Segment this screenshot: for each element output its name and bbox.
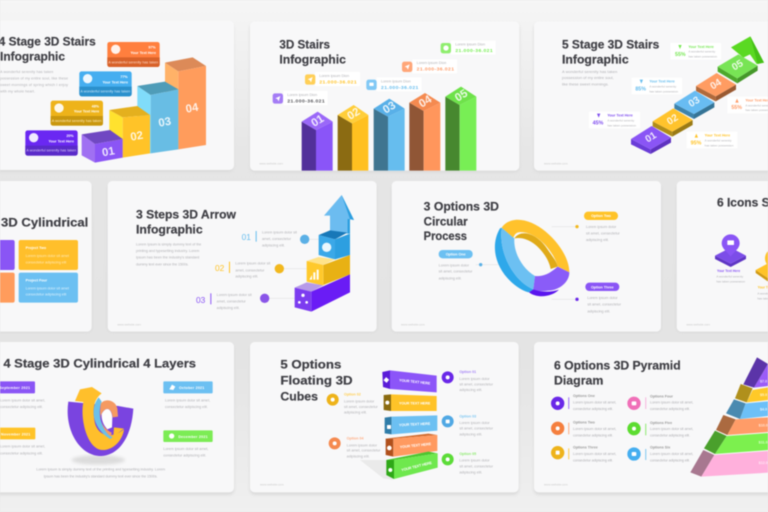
title: Infographic: [562, 53, 629, 67]
pyramid: $5.0: [760, 393, 767, 397]
icon purple: has taken possession: [716, 280, 745, 284]
callout 45%: has taken possession: [607, 123, 636, 127]
option 02: adipiscing elit.: [344, 410, 367, 414]
card yellow: Project Two: [26, 246, 47, 250]
label 2: [305, 72, 360, 86]
pyramid: $4.0: [760, 408, 767, 412]
card orange: [0, 273, 15, 303]
stair 02: 02: [130, 130, 144, 144]
callout 55% green: [670, 43, 721, 60]
option 01: [442, 370, 494, 392]
text block: [36, 468, 165, 478]
pyramid: $12.0: [759, 461, 768, 465]
title: Infographic: [0, 49, 65, 63]
label 4: 21.000-36.021: [417, 67, 454, 73]
item 01: [242, 231, 320, 248]
3D arrow stairs: [295, 195, 354, 312]
callout 85%: 85%: [635, 87, 646, 93]
item 02: 02: [215, 263, 225, 273]
footer: www.website.com: [260, 483, 284, 487]
card yellow: Lorem ipsum dolor sit amet: [26, 254, 69, 258]
option three: Lorem ipsum dolor sit amet,: [573, 452, 616, 456]
item 03: 03: [196, 295, 206, 305]
option 05: sit amet, consectetur: [459, 464, 494, 468]
3D cylinder layers: [68, 387, 133, 456]
callout 95%: 95%: [691, 141, 702, 147]
icon purple: A wonderful serenity: [716, 274, 744, 278]
panel: 4 Stage 3D Stairs: [0, 21, 234, 172]
cube green: [386, 452, 438, 479]
option three: Options Three: [573, 445, 598, 449]
text block: A wonderful serenity has taken: [0, 70, 53, 74]
option 01: sit amet, consectetur: [459, 383, 494, 387]
option 03: sit amet, consectetur: [459, 426, 494, 430]
card blue: [19, 273, 78, 303]
title: Floating 3D: [280, 374, 353, 388]
chip September: September 2021: [0, 386, 30, 390]
option 04: [329, 436, 381, 459]
cube green: YOUR TEXT HERE: [401, 461, 433, 472]
option 04: adipiscing elit.: [347, 455, 370, 459]
item 02: adipiscing elit.: [235, 275, 258, 279]
card: orange 97%: Your Text Here: [131, 51, 156, 55]
callout 55% green: has taken possession: [688, 54, 717, 58]
option two: adipiscing elit.: [586, 238, 609, 242]
text block: [562, 69, 617, 86]
cube orange: [386, 434, 437, 457]
arrow: [731, 36, 764, 64]
stair 02: [109, 106, 150, 158]
option three: consectetur adipiscing elit.: [573, 458, 613, 462]
title: [0, 35, 96, 63]
option four: consectetur adipiscing elit.: [650, 407, 690, 411]
3D ring: [495, 220, 569, 296]
cube yellow: [384, 394, 437, 411]
text block: like these sweet mornings.: [562, 81, 609, 86]
item 03: adipiscing elit.: [217, 306, 240, 310]
card: blue 77%: A wonderful serenity has taken: [80, 90, 130, 94]
card blue: Lorem ipsum dolor sit amet: [26, 286, 69, 290]
step 01: [631, 126, 671, 154]
option six: consectetur adipiscing elit.: [650, 458, 690, 462]
title: 5 Stage 3D Stairs: [562, 38, 660, 52]
text block: [0, 70, 68, 93]
option 03: Option 03: [459, 414, 476, 418]
bar 01: 01: [309, 113, 326, 130]
text block: Lorem Ipsum is simply dummy text of the: [136, 242, 201, 246]
chip September: Lorem ipsum dolor sit amet,: [0, 399, 45, 403]
step 01: 01: [643, 130, 659, 145]
option four: Options Four: [650, 394, 674, 398]
card blue: consectetur adipiscing elit: [26, 293, 66, 297]
pyramid: $10.0: [759, 424, 768, 428]
option 02: Option 02: [344, 392, 361, 396]
callout 55% orange: 55%: [731, 105, 742, 111]
bar 04: 04: [417, 93, 435, 110]
pyramid: [690, 357, 768, 477]
step 04: 04: [708, 77, 724, 92]
panel: 3 Steps 3D Arrow: [108, 181, 377, 332]
title: 3D Cylindrical: [1, 215, 88, 229]
title: [280, 357, 353, 404]
title: 3 Steps 3D Arrow: [136, 208, 237, 222]
option three: Lorem ipsum dolor: [587, 296, 618, 300]
label 2: Lorem ipsum Dion: [319, 74, 349, 78]
title: 3D Stairs: [279, 38, 330, 52]
pyramid: $7.0: [760, 379, 767, 383]
text block: with my whole heart.: [0, 89, 35, 93]
chip November: [0, 428, 45, 455]
option six: [627, 445, 693, 462]
title: [554, 359, 681, 388]
option two: sit amet, consectetur: [586, 232, 621, 236]
item 03: [196, 293, 295, 310]
chip December: [163, 430, 213, 458]
card purple: [0, 240, 15, 270]
panel: 6 Icons Steps: [677, 181, 768, 332]
title: 4 Stage 3D Cylindrical 4 Layers: [3, 356, 196, 370]
option four: [627, 394, 693, 411]
title: [136, 208, 237, 237]
callout 45%: 45%: [593, 121, 604, 127]
option one: Option One: [446, 252, 466, 256]
option 05: Option 05: [459, 452, 476, 456]
option 05: adipiscing elit.: [459, 470, 482, 474]
option three: Option Three: [591, 285, 614, 289]
footer: www.website.com: [544, 162, 568, 166]
step 03: [674, 91, 714, 119]
option six: Lorem ipsum dolor sit amet,: [650, 452, 693, 456]
stair 03: [137, 82, 178, 153]
option two: consectetur adipiscing elit.: [573, 433, 613, 437]
stair 04: 04: [185, 102, 200, 116]
step 03: 03: [687, 95, 702, 110]
cube orange: YOUR TEXT HERE: [400, 442, 432, 449]
title: Infographic: [279, 53, 346, 67]
step 05: [718, 54, 758, 83]
cube blue: [385, 415, 437, 434]
icon yellow: [756, 248, 768, 300]
card: blue 77%: Your Text Here: [103, 80, 128, 84]
title: Diagram: [554, 374, 603, 388]
chip December: December 2021: [178, 435, 208, 439]
text block: A wonderful serenity has taken: [562, 69, 617, 74]
callout 45%: [589, 112, 640, 128]
callout 95%: [687, 132, 737, 148]
card: blue 77%: [79, 71, 132, 96]
option 05: Lorem ipsum dolor: [459, 459, 490, 463]
card: yellow 48%: 48%: [92, 104, 100, 108]
bar 05: [445, 87, 476, 171]
label 1: 21.000-36.021: [287, 99, 325, 105]
card: purple 20%: 20%: [66, 134, 74, 138]
option five: [627, 421, 693, 437]
step 04: [696, 73, 736, 101]
callout 85%: A wonderful serenity: [649, 85, 677, 89]
option three: sit amet, consectetur: [587, 303, 622, 307]
callout 95%: Your Text Here: [705, 134, 730, 138]
option 04: sit amet, consectetur: [347, 449, 381, 453]
panel: 3D Stairs Infographic: [250, 21, 519, 172]
text block: Lorem Ipsum is simply dummy text of the printing and typesetting industry. Lorem: [36, 468, 165, 472]
callout 95%: has taken possession: [705, 143, 734, 147]
card blue: Project Four: [26, 278, 48, 282]
step 02: 02: [665, 112, 681, 128]
option five: consectetur adipiscing elit.: [650, 433, 690, 437]
cube purple: YOUR TEXT HERE: [399, 378, 431, 386]
option two: [552, 212, 621, 242]
callout 55% green: 55%: [675, 52, 686, 58]
cube blue: YOUR TEXT HERE: [399, 422, 431, 427]
label 1: [273, 91, 328, 105]
option two: Options Two: [573, 420, 596, 424]
card: yellow 48%: [51, 101, 103, 126]
label 3: Lorem ipsum Dion: [381, 79, 411, 83]
card: orange 97%: 97%: [148, 46, 156, 50]
option 03: adipiscing elit.: [459, 432, 482, 436]
callout 45%: Your Text Here: [607, 113, 633, 117]
footer: www.website.com: [117, 322, 142, 326]
bar 04: [409, 93, 440, 171]
option three: [551, 445, 616, 462]
title: Circular: [424, 214, 468, 228]
label 3: 21.000-36.021: [381, 85, 419, 91]
chip November: November 2021: [1, 433, 30, 437]
item 02: Lorem ipsum dolor sit: [235, 262, 270, 266]
text block: Ipsum has been the industry's standard dummy text ever since the 1500s.: [44, 474, 158, 478]
option one: [439, 250, 498, 280]
item 01: amet, consectetur: [262, 237, 292, 241]
bar 03: [374, 99, 405, 171]
text block: sweet mornings of spring which I enjoy: [0, 83, 68, 87]
pyramid: $11.0: [759, 440, 768, 444]
panel: 3 Options 3D Circular Process: [392, 181, 661, 332]
item 02: amet, consectetur: [235, 268, 265, 272]
label 4: [402, 59, 457, 73]
panel: 3D Cylindrical: [0, 181, 92, 332]
text block: dummy text ever since the 1500s.: [136, 262, 189, 266]
option three: [552, 283, 622, 313]
chip October: October 2021: [179, 386, 204, 390]
item 01: Lorem ipsum dolor sit: [262, 231, 297, 235]
panel: 5 Options Floating 3D Cubes: [250, 342, 519, 495]
option 02: [327, 392, 379, 414]
footer: www.website.com: [401, 322, 425, 326]
text block: printing and typesetting industry. Lorem: [136, 249, 199, 253]
title: [424, 200, 499, 243]
title: 5 Options: [280, 357, 341, 371]
chip November: Lorem ipsum dolor sit amet,: [0, 445, 45, 449]
stair 01: 01: [101, 145, 116, 159]
option two: [551, 420, 616, 437]
bar 05: 05: [453, 88, 470, 104]
title: [279, 38, 346, 67]
option one: [551, 394, 616, 411]
option one: sit amet, consectetur: [439, 270, 473, 274]
option four: Lorem ipsum dolor sit amet,: [650, 401, 693, 405]
title: Process: [424, 229, 467, 243]
text block: [136, 242, 201, 266]
callout 45%: A wonderful serenity: [607, 119, 635, 123]
icon purple: [715, 234, 746, 284]
panel: 4 Stage 3D Cylindrical 4 Layers: [0, 342, 234, 495]
title: [562, 38, 660, 67]
option six: Options Six: [650, 445, 670, 449]
callout 85%: [632, 78, 682, 94]
option 03: [442, 414, 494, 436]
option five: Lorem ipsum dolor sit amet,: [650, 427, 693, 431]
stair 03: 03: [158, 116, 172, 130]
option two: Option Two: [591, 214, 612, 218]
title: Infographic: [136, 223, 203, 237]
text block: possession of my entire soul,: [562, 75, 614, 80]
callout 85%: Your Text Here: [649, 80, 675, 84]
card: purple 20%: Your Text Here: [49, 139, 74, 143]
chip December: consectetur adipiscing elit.: [163, 454, 206, 458]
option two: Lorem ipsum dolor sit amet,: [573, 427, 616, 431]
icon purple: Your Text Here: [717, 269, 740, 273]
label 4: Lorem ipsum Dion: [417, 61, 446, 65]
chip December: Lorem ipsum dolor sit amet,: [163, 447, 208, 451]
stair 01: [82, 130, 123, 163]
bar 03: 03: [381, 100, 398, 116]
card yellow: [19, 240, 78, 270]
option 04: Option 04: [347, 436, 364, 440]
title: 6 Options 3D Pyramid: [554, 359, 681, 373]
item 01: 01: [242, 232, 251, 242]
card: purple 20%: [25, 130, 78, 156]
option one: Lorem ipsum dolor: [439, 263, 470, 267]
label 5: Lorem ipsum Dion: [455, 42, 485, 46]
stair 04: [165, 57, 206, 149]
panel: 5 Stage 3D Stairs: [534, 21, 768, 172]
label 3: [366, 77, 422, 91]
option 01: Option 01: [459, 370, 476, 374]
card: yellow 48%: A wonderful serenity has taken: [52, 119, 102, 123]
bar 02: [338, 105, 368, 171]
option 02: sit amet, consectetur: [344, 405, 379, 409]
option 02: Lorem ipsum dolor: [344, 399, 375, 403]
footer: www.website.com: [686, 322, 711, 326]
shadow under shape: [72, 455, 125, 465]
cube purple: [382, 370, 437, 392]
panel: 6 Options 3D Pyramid: [534, 342, 768, 495]
bar 01: [302, 112, 333, 171]
card: purple 20%: A wonderful serenity has taken: [26, 149, 76, 153]
label 5: 21.000-36.021: [455, 48, 493, 54]
label 5: [441, 41, 496, 55]
option three: adipiscing elit.: [587, 309, 610, 313]
card: orange 97%: A wonderful serenity has taken: [108, 60, 158, 64]
label 1: Lorem ipsum Dion: [287, 93, 317, 97]
callout 95%: A wonderful serenity: [705, 139, 732, 143]
option one: adipiscing elit.: [439, 276, 462, 280]
title: Cubes: [280, 390, 318, 404]
option two: Lorem ipsum dolor: [586, 225, 617, 229]
callout 55% orange: [727, 97, 768, 113]
option 01: Lorem ipsum dolor: [459, 377, 490, 381]
text block: possession of my entire soul, like these: [0, 76, 68, 80]
shadow: [360, 460, 393, 480]
bar 02: 02: [345, 106, 362, 123]
card: orange 97%: [107, 42, 160, 67]
option 03: Lorem ipsum dolor: [459, 421, 490, 425]
chip September: consectetur adipiscing elit.: [0, 405, 43, 409]
title: 3 Options 3D: [424, 200, 499, 214]
card: blue 77%: 77%: [120, 75, 128, 79]
chip October: Lorem ipsum dolor sit amet,: [165, 399, 210, 403]
title: 4 Stage 3D Stairs: [0, 35, 96, 49]
chip October: consectetur adipiscing elit.: [165, 405, 208, 409]
callout 55% green: Your Text Here: [688, 45, 714, 49]
callout 85%: has taken possession: [649, 89, 678, 93]
item 01: adipiscing elit.: [262, 244, 285, 248]
label 2: 21.000-36.021: [319, 80, 357, 86]
card: yellow 48%: Your Text Here: [74, 110, 99, 114]
text block: Ipsum has been the industry's standard: [136, 256, 199, 260]
callout 55% green: A wonderful serenity: [688, 50, 716, 54]
step 02: [653, 108, 693, 137]
card yellow: consectetur adipiscing elit: [26, 260, 66, 264]
option 04: Lorem ipsum dolor: [347, 443, 378, 447]
option five: Options Five: [650, 421, 672, 425]
item 03: Lorem ipsum dolor sit: [217, 293, 252, 297]
option one: consectetur adipiscing elit.: [573, 407, 613, 411]
option 05: [442, 452, 494, 474]
option 01: adipiscing elit.: [459, 388, 482, 392]
item 02: [215, 262, 307, 279]
chip October: [163, 381, 213, 409]
option one: Options One: [573, 394, 595, 398]
footer: www.website.com: [259, 162, 284, 166]
step 05: 05: [730, 58, 746, 73]
item 03: amet, consectetur: [217, 300, 247, 304]
chip September: [0, 381, 45, 409]
chip November: consectetur adipiscing elit.: [0, 451, 43, 455]
footer: www.website.com: [544, 483, 568, 487]
option one: Lorem ipsum dolor sit amet,: [573, 401, 616, 405]
cube yellow: YOUR TEXT HERE: [399, 402, 431, 406]
